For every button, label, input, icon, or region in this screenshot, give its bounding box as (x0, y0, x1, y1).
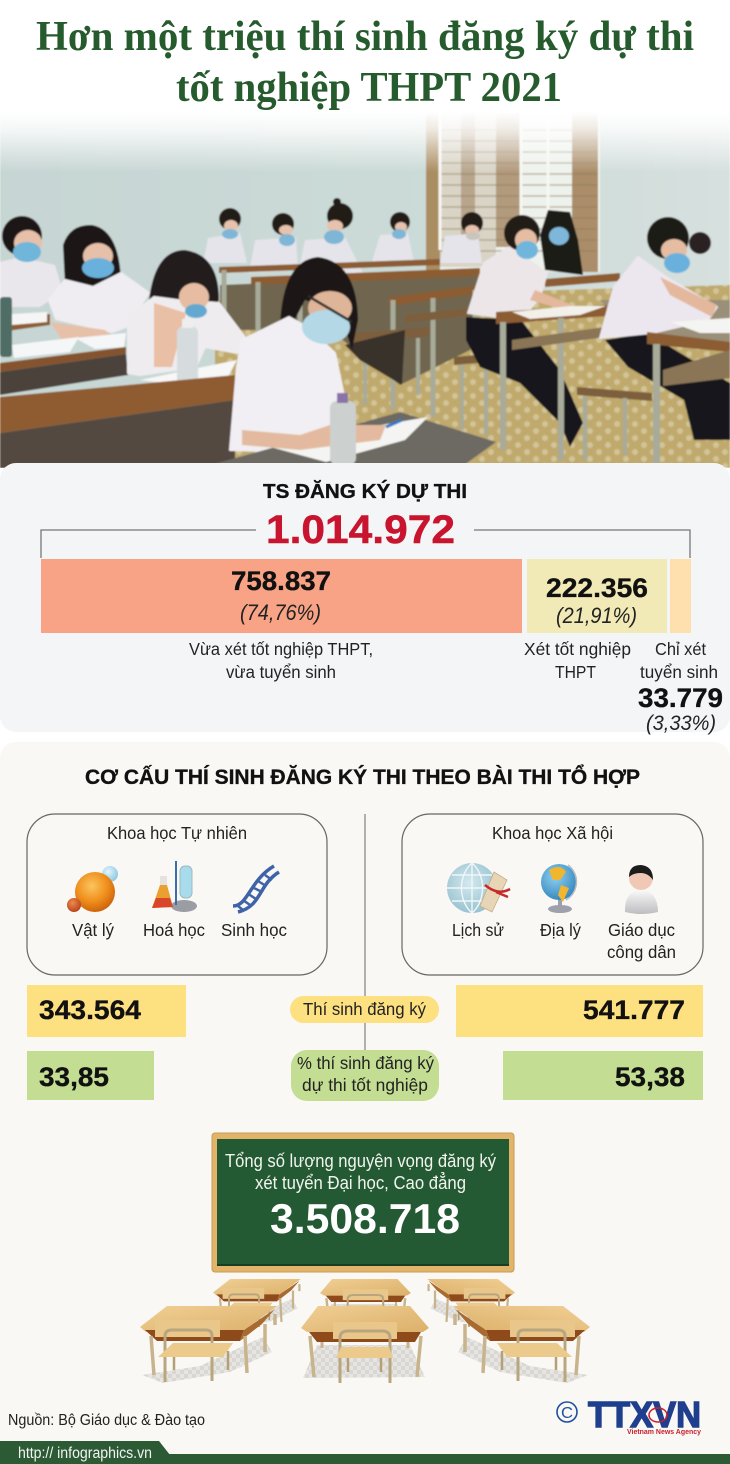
pill: percentage of candidates: dự thi tốt nghiệp (302, 1075, 428, 1095)
title: tốt nghiệp THPT 2021 (176, 65, 562, 111)
box: social sciences: Khoa học Xã hội (492, 823, 613, 843)
blackboard with total wishes (212, 1133, 514, 1272)
bar: social sciences percentage: 53,38 (615, 1062, 685, 1092)
icon: civics person (625, 865, 658, 914)
right student behind (540, 210, 583, 275)
label: history: Lịch sử (452, 920, 504, 940)
benches (354, 308, 489, 365)
floor and shaded under-desk area (215, 285, 730, 468)
heading: CƠ CẤU THÍ SINH ĐĂNG KÝ THI THEO BÀI THI TỔ HỢP (85, 765, 640, 789)
left student 2 (63, 225, 121, 290)
dark under back desks (345, 330, 405, 385)
big left desk (0, 375, 235, 433)
title: Hơn một triệu thí sinh đăng ký dự thi (36, 14, 694, 60)
blackboard with total wishes: Tổng số lượng nguyện vọng đăng ký (225, 1151, 496, 1171)
bar: graduation only: 222.356 (546, 573, 648, 603)
label: civics: công dân (607, 942, 676, 962)
footer bar with website (0, 1441, 730, 1464)
title (36, 14, 694, 111)
desks back rows (219, 259, 620, 306)
bar: social sciences candidates: 541.777 (583, 995, 685, 1025)
logo: TTXVN: TTXVN (588, 1394, 701, 1435)
bar: natural sciences percentage (27, 1051, 154, 1100)
pill: registered candidates (290, 996, 439, 1023)
label: biology: Sinh học (221, 920, 287, 940)
logo: TTXVN: C (561, 1405, 573, 1422)
front student (280, 257, 358, 350)
left desks (10, 313, 51, 331)
photo: students sitting the exam in a classroom (0, 112, 730, 468)
footer bar with website: http:// infographics.vn (18, 1445, 152, 1462)
bar: natural sciences percentage: 33,85 (39, 1062, 109, 1092)
classroom desks and chairs (140, 1279, 590, 1383)
icon: physics atom (67, 866, 118, 912)
label: graduation only: THPT (555, 662, 596, 682)
pill: registered candidates: Thí sinh đăng ký (303, 999, 426, 1019)
label: admission only: 33.779 (638, 683, 723, 713)
label: admission only (638, 639, 723, 735)
bar: graduation only (527, 559, 667, 633)
bar: both purposes: (74,76%) (240, 600, 321, 625)
icon: DNA helix (233, 866, 279, 912)
pill: percentage of candidates: % thí sinh đăng ký (297, 1053, 434, 1073)
bar: natural sciences candidates (27, 985, 186, 1037)
bar: social sciences candidates (456, 985, 703, 1037)
icon: geography globe (541, 864, 577, 913)
label: admission only: (3,33%) (646, 712, 716, 735)
right desk 1 (496, 305, 607, 324)
bench right (512, 327, 605, 350)
right student 1 (466, 317, 583, 447)
centre divider (364, 814, 366, 1052)
bracket (41, 530, 690, 558)
source: Nguồn: Bộ Giáo dục & Đào tạo (8, 1412, 205, 1429)
label: both purposes: vừa tuyển sinh (226, 662, 336, 682)
back row shirts (203, 233, 482, 273)
metal legs (224, 270, 475, 417)
box: natural sciences: Khoa học Tự nhiên (107, 823, 247, 843)
front desk (216, 411, 496, 463)
left student 3 (bending) (148, 249, 220, 303)
back row heads (219, 198, 483, 235)
label: civics (607, 920, 676, 962)
bar: graduation only: (21,91%) (556, 603, 637, 628)
heading: TS ĐĂNG KÝ DỰ THI (263, 479, 467, 503)
right student 2 (605, 333, 730, 440)
label: both purposes (189, 639, 373, 682)
top fade of photo (0, 112, 730, 172)
blackboard with total wishes: 3.508.718 (270, 1195, 460, 1242)
bar: natural sciences candidates: 343.564 (39, 995, 141, 1025)
icon: history globe and scroll (447, 863, 510, 913)
icon: chemistry flask and tube (152, 861, 197, 912)
panel: total registered candidates (0, 463, 730, 735)
right desk 2 (647, 332, 730, 352)
panel: exam combinations (0, 742, 730, 1464)
label: both purposes: Vừa xét tốt nghiệp THPT, (189, 639, 373, 659)
window (440, 134, 600, 272)
label: graduation only (524, 639, 631, 682)
bar: social sciences percentage (503, 1051, 703, 1100)
label: graduation only: Xét tốt nghiệp (524, 639, 631, 659)
pill: percentage of candidates (291, 1050, 439, 1101)
label: civics: Giáo dục (608, 920, 675, 940)
label: geography: Địa lý (540, 920, 581, 940)
bar: admission only (670, 559, 691, 633)
label: chemistry: Hoá học (143, 920, 205, 940)
blackboard with total wishes: xét tuyển Đại học, Cao đẳng (255, 1172, 466, 1193)
bar: both purposes: 758.837 (231, 566, 331, 596)
left student 1 (0, 257, 63, 307)
label: admission only: tuyển sinh (640, 662, 718, 682)
label: physics: Vật lý (72, 920, 114, 940)
bar: both purposes (41, 559, 522, 633)
box: natural sciences (27, 814, 327, 975)
box: social sciences (402, 814, 703, 975)
label: admission only: Chỉ xét (655, 639, 706, 659)
total number: 1.014.972 (266, 508, 455, 552)
logo: TTXVN: Vietnam News Agency (627, 1427, 702, 1436)
